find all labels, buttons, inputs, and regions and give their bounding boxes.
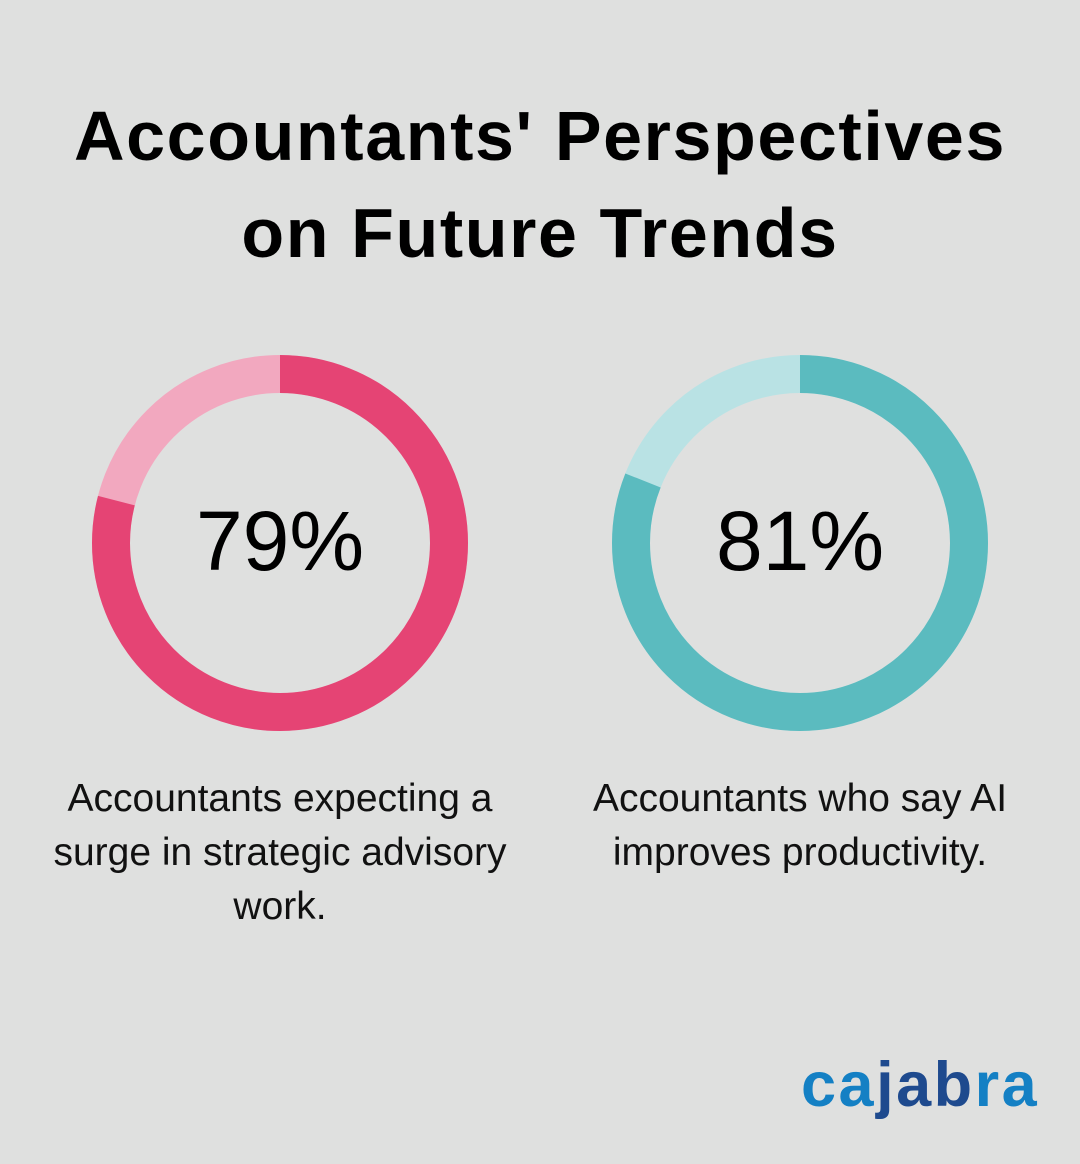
title: on Future Trends xyxy=(241,194,839,272)
donut charts xyxy=(92,355,988,731)
caption left: Accountants expecting a surge in strategic advisory work. xyxy=(53,777,507,928)
title xyxy=(74,97,1006,272)
donut 81% xyxy=(631,374,969,712)
donut 81%: 81% xyxy=(716,494,884,588)
title: Accountants' Perspectives xyxy=(74,97,1006,175)
caption right: Accountants who say AI improves productivity. xyxy=(593,777,1007,874)
donut 79%: 79% xyxy=(196,494,364,588)
donut 79% xyxy=(111,374,449,712)
logo: cajabra xyxy=(801,1050,1039,1120)
